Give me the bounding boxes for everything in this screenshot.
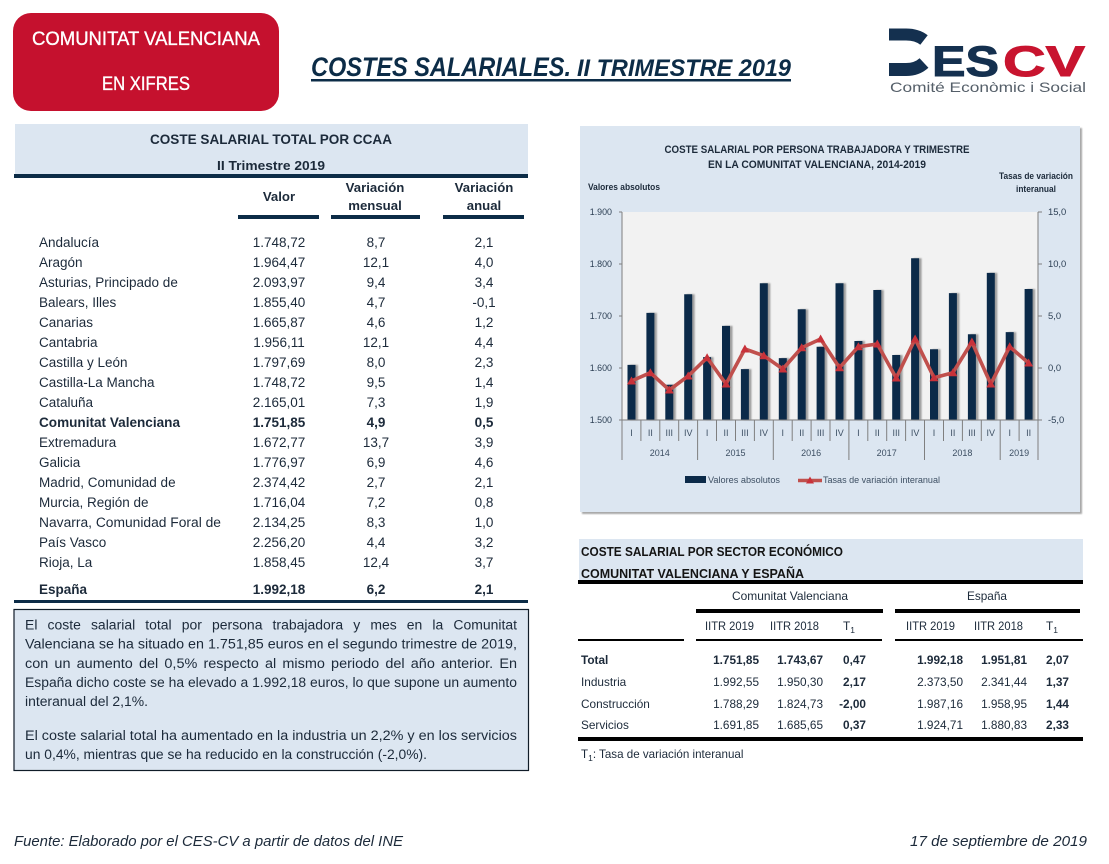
column headers: T xyxy=(843,619,850,633)
text block: summary: un 0,4%, mientras que se ha reducido en la construcción (-2,0%). xyxy=(25,747,427,762)
table rows: 2.093,97 xyxy=(253,275,305,290)
sector table heading xyxy=(578,539,1083,584)
table rows: 1.858,45 xyxy=(253,555,305,570)
left axis: 1.900 xyxy=(590,207,612,217)
table rows: 6,9 xyxy=(367,455,385,470)
table rows: 2,3 xyxy=(475,355,493,370)
category axis: I xyxy=(933,428,935,438)
table rows: 1.716,04 xyxy=(253,495,306,510)
sector rows xyxy=(578,653,1083,741)
left axis title: Valores absolutos xyxy=(588,182,660,192)
category axis: II xyxy=(875,428,880,438)
column headers: IITR 2019 xyxy=(705,619,754,633)
category axis: III xyxy=(892,428,900,438)
table rows: 1.672,77 xyxy=(253,435,305,450)
table rows: Galicia xyxy=(39,455,81,470)
table rows: 2,1 xyxy=(475,235,493,250)
sector rows: 1.880,83 xyxy=(981,718,1027,732)
column headers: T xyxy=(1046,619,1053,633)
sector rows: 2.341,44 xyxy=(981,675,1027,689)
panel: coste salarial total por CCAA xyxy=(14,124,528,603)
badge: Comunitat Valenciana en xifres: EN XIFRES xyxy=(102,73,190,95)
category axis: I xyxy=(706,428,708,438)
total row: España: 6,2 xyxy=(367,582,385,597)
table rows: 13,7 xyxy=(363,435,389,450)
category axis: II xyxy=(799,428,804,438)
category axis: 2016 xyxy=(801,448,821,458)
sector rows: 2,17 xyxy=(843,675,866,689)
sector rows: Total xyxy=(581,653,608,667)
table rows: Cantabria xyxy=(39,335,98,350)
table rows: 1.665,87 xyxy=(253,315,305,330)
right axis: 15,0 xyxy=(1048,206,1066,217)
category axis: IV xyxy=(911,428,919,438)
table rows: 12,4 xyxy=(363,555,390,570)
table rows: 1.776,97 xyxy=(253,455,305,470)
total row: España: 1.992,18 xyxy=(253,582,306,597)
sector rows: 1.824,73 xyxy=(777,697,823,711)
group headers xyxy=(696,589,1080,613)
category axis: IV xyxy=(987,428,995,438)
table rows: 4,0 xyxy=(475,255,493,270)
right axis xyxy=(1038,206,1066,425)
category axis: II xyxy=(648,428,653,438)
sector rows: 1.992,18 xyxy=(917,653,963,667)
table rows: 1,0 xyxy=(475,515,493,530)
total row: España xyxy=(14,582,528,603)
table rows: 4,6 xyxy=(367,315,385,330)
table rows: 2.134,25 xyxy=(253,515,305,530)
table rows xyxy=(39,235,496,570)
right axis: 0,0 xyxy=(1048,362,1061,373)
column headers: Valor xyxy=(263,189,295,204)
total row: España: 2,1 xyxy=(475,582,494,597)
text block: summary: Valenciana se ha situado en 1.751,85 euros en el segundo trimestre de 2019, xyxy=(25,636,517,652)
table rows: 3,7 xyxy=(475,555,493,570)
table rows: Murcia, Región de xyxy=(39,495,149,510)
category axis: 2018 xyxy=(952,448,972,458)
table rows: 0,8 xyxy=(475,495,493,510)
category axis xyxy=(622,420,1038,460)
table rows: 2.374,42 xyxy=(253,475,305,490)
left axis xyxy=(590,207,622,425)
text block: summary: El coste salarial total por persona trabajadora y mes en la Comunitat xyxy=(25,618,517,632)
table rows: Comunitat Valenciana xyxy=(39,415,180,430)
table rows: 1,2 xyxy=(475,315,493,330)
group headers: Comunitat Valenciana xyxy=(732,589,848,603)
sector rows: 1.743,67 xyxy=(777,653,823,667)
sector rows: 1.924,71 xyxy=(917,718,963,732)
table rows: 1.748,72 xyxy=(253,375,305,390)
chart title: COSTE SALARIAL POR PERSONA TRABAJADORA Y TRIMESTRE xyxy=(664,144,970,156)
footnote: 1 xyxy=(588,753,593,763)
text block: summary xyxy=(14,610,528,770)
sector rows: 2.373,50 xyxy=(917,675,963,689)
sector rows: Construcción xyxy=(581,697,650,711)
title xyxy=(311,52,792,82)
table rows: 1.956,11 xyxy=(253,335,305,350)
table rows: 12,1 xyxy=(363,335,389,350)
footer: date: 17 de septiembre de 2019 xyxy=(910,833,1088,850)
table rows: 3,4 xyxy=(475,275,494,290)
table rows: Castilla y León xyxy=(39,355,128,370)
table rows: Aragón xyxy=(39,255,83,270)
table rows: 4,9 xyxy=(367,415,385,430)
left axis: 1.600 xyxy=(590,363,612,373)
logo: CES CV: ES xyxy=(932,38,999,86)
column headers xyxy=(578,619,1083,641)
right axis: 5,0 xyxy=(1048,310,1061,321)
footer: source: Fuente: Elaborado por el CES-CV a partir de datos del INE xyxy=(14,833,404,850)
chart title xyxy=(664,144,970,171)
table rows: 8,7 xyxy=(367,235,385,250)
sector rows: 1.958,95 xyxy=(981,697,1027,711)
sector rows: Industria xyxy=(581,675,627,689)
table heading: COSTE SALARIAL TOTAL POR CCAA xyxy=(150,132,392,147)
table rows: Rioja, La xyxy=(39,555,93,570)
left axis: 1.800 xyxy=(590,259,612,269)
category axis: III xyxy=(666,428,673,438)
category axis: I xyxy=(1008,428,1011,438)
column headers: 1 xyxy=(850,625,855,635)
text block: summary: España dicho coste se ha elevado a 1.992,18 euros, lo que supone un aumento xyxy=(25,675,517,690)
table rows: 9,5 xyxy=(367,375,385,390)
column headers: anual xyxy=(467,198,501,213)
sector rows: 1.987,16 xyxy=(917,697,963,711)
category axis: I xyxy=(630,428,633,438)
column headers: IITR 2018 xyxy=(974,619,1023,633)
right axis: -5,0 xyxy=(1048,414,1064,425)
text block: summary: El coste salarial total ha aumentado en la industria un 2,2% y en los servicios xyxy=(25,728,517,743)
table rows: 0,5 xyxy=(475,415,494,430)
group headers: España xyxy=(967,589,1007,603)
table heading: II Trimestre 2019 xyxy=(217,159,325,173)
table rows: 7,3 xyxy=(367,395,385,410)
table rows: 1,9 xyxy=(475,395,493,410)
column headers: Variación xyxy=(346,180,404,195)
legend: Tasas de variación interanual xyxy=(823,475,940,485)
table heading xyxy=(14,124,528,178)
legend xyxy=(685,475,940,485)
table rows: 12,1 xyxy=(363,255,389,270)
logo: CES CV xyxy=(889,34,1086,95)
sector rows: -2,00 xyxy=(839,697,866,711)
category axis: IV xyxy=(835,428,844,438)
column headers: mensual xyxy=(348,198,402,213)
category axis: 2014 xyxy=(650,448,670,458)
category axis: III xyxy=(817,428,824,438)
legend: Valores absolutos xyxy=(708,475,781,485)
sector rows: 1,44 xyxy=(1046,697,1069,711)
table rows: Madrid, Comunidad de xyxy=(39,475,176,490)
column headers: IITR 2018 xyxy=(770,619,819,633)
sector rows: 1,37 xyxy=(1046,675,1069,689)
table rows: 2.165,01 xyxy=(253,395,305,410)
bars: valores absolutos xyxy=(628,258,1035,420)
sector rows: 1.751,85 xyxy=(713,653,759,667)
sector rows: 1.950,30 xyxy=(777,675,823,689)
sector table heading: COMUNITAT VALENCIANA Y ESPAÑA xyxy=(581,566,804,581)
column headers xyxy=(238,180,524,219)
category axis: 2015 xyxy=(725,448,746,458)
table rows: 3,9 xyxy=(475,435,493,450)
text block: summary: con un aumento del 0,5% respecto al mismo periodo del año anterior. En xyxy=(25,656,517,671)
table rows: País Vasco xyxy=(39,535,106,550)
sector table heading: COSTE SALARIAL POR SECTOR ECONÓMICO xyxy=(581,544,843,559)
category axis: I xyxy=(857,428,860,438)
table rows: 3,2 xyxy=(475,535,493,550)
table rows: 9,4 xyxy=(367,275,386,290)
table rows: 1.748,72 xyxy=(253,235,305,250)
table rows: Asturias, Principado de xyxy=(39,275,178,290)
table rows: -0,1 xyxy=(472,295,496,310)
panel: coste salarial por sector económico xyxy=(578,539,1083,763)
sector rows: Servicios xyxy=(581,718,629,732)
right axis title: Tasas de variación xyxy=(999,171,1073,181)
table rows: 4,4 xyxy=(475,335,494,350)
column headers: 1 xyxy=(1053,625,1058,635)
logo: CES CV: CV xyxy=(1003,38,1085,86)
sector rows: 1.951,81 xyxy=(981,653,1027,667)
table rows: 2,7 xyxy=(367,475,385,490)
table rows: Balears, Illes xyxy=(39,295,117,310)
title: II TRIMESTRE 2019 xyxy=(577,55,792,82)
table rows: Castilla-La Mancha xyxy=(39,375,155,390)
table rows: 4,6 xyxy=(475,455,493,470)
badge: Comunitat Valenciana en xifres: COMUNITAT VALENCIANA xyxy=(32,28,260,50)
title: COSTES SALARIALES. xyxy=(311,52,571,82)
sector rows: 1.992,55 xyxy=(713,675,759,689)
table rows: 4,7 xyxy=(367,295,385,310)
right axis: 10,0 xyxy=(1048,258,1066,269)
column headers: IITR 2019 xyxy=(906,619,955,633)
line: tasas de variación interanual xyxy=(627,334,1033,394)
category axis: II xyxy=(950,428,955,438)
category axis: II xyxy=(1026,428,1031,438)
panel: combo chart coste salarial por persona trabajadora xyxy=(580,126,1082,514)
table rows: 1.964,47 xyxy=(253,255,305,270)
category axis: 2017 xyxy=(877,448,897,458)
right axis title xyxy=(999,171,1073,194)
table rows: 2.256,20 xyxy=(253,535,305,550)
sector rows: 1.788,29 xyxy=(713,697,759,711)
table rows: 1.797,69 xyxy=(253,355,305,370)
sector rows: 2,33 xyxy=(1046,718,1069,732)
logo: CES CV: Comité Econòmic i Social xyxy=(890,79,1086,95)
sector rows: 1.691,85 xyxy=(713,718,759,732)
table rows: 8,0 xyxy=(367,355,385,370)
sector rows: 0,47 xyxy=(843,653,866,667)
table rows: 2,1 xyxy=(475,475,493,490)
left axis: 1.500 xyxy=(590,415,612,425)
chart background xyxy=(580,126,1082,514)
table rows: 1.751,85 xyxy=(253,415,306,430)
table rows: Navarra, Comunidad Foral de xyxy=(39,515,221,530)
table rows: 1.855,40 xyxy=(253,295,305,310)
table rows: 1,4 xyxy=(475,375,494,390)
text block: summary: interanual del 2,1%. xyxy=(25,694,148,709)
footnote: : Tasa de variación interanual xyxy=(593,748,743,761)
column headers: Variación xyxy=(455,180,513,195)
category axis: 2019 xyxy=(1009,448,1029,458)
left axis: 1.700 xyxy=(590,311,612,321)
category axis: I xyxy=(782,428,784,438)
table rows: Canarias xyxy=(39,315,93,330)
table rows: Cataluña xyxy=(39,395,94,410)
table rows: Extremadura xyxy=(39,435,117,450)
table rows: 4,4 xyxy=(367,535,386,550)
footnote: T xyxy=(581,748,588,761)
right axis title: interanual xyxy=(1016,184,1056,194)
sector rows: 2,07 xyxy=(1046,653,1069,667)
category axis: IV xyxy=(684,428,692,438)
category axis: III xyxy=(741,428,749,438)
category axis: III xyxy=(968,428,976,438)
category axis: IV xyxy=(760,428,768,438)
sector rows: 0,37 xyxy=(843,718,866,732)
table rows: Andalucía xyxy=(39,235,100,250)
sector rows: 1.685,65 xyxy=(777,718,823,732)
chart title: EN LA COMUNITAT VALENCIANA, 2014-2019 xyxy=(708,159,926,171)
table rows: 7,2 xyxy=(367,495,385,510)
badge: Comunitat Valenciana en xifres xyxy=(13,13,279,111)
total row: España: España xyxy=(39,582,88,597)
category axis: II xyxy=(723,428,729,438)
table rows: 8,3 xyxy=(367,515,385,530)
